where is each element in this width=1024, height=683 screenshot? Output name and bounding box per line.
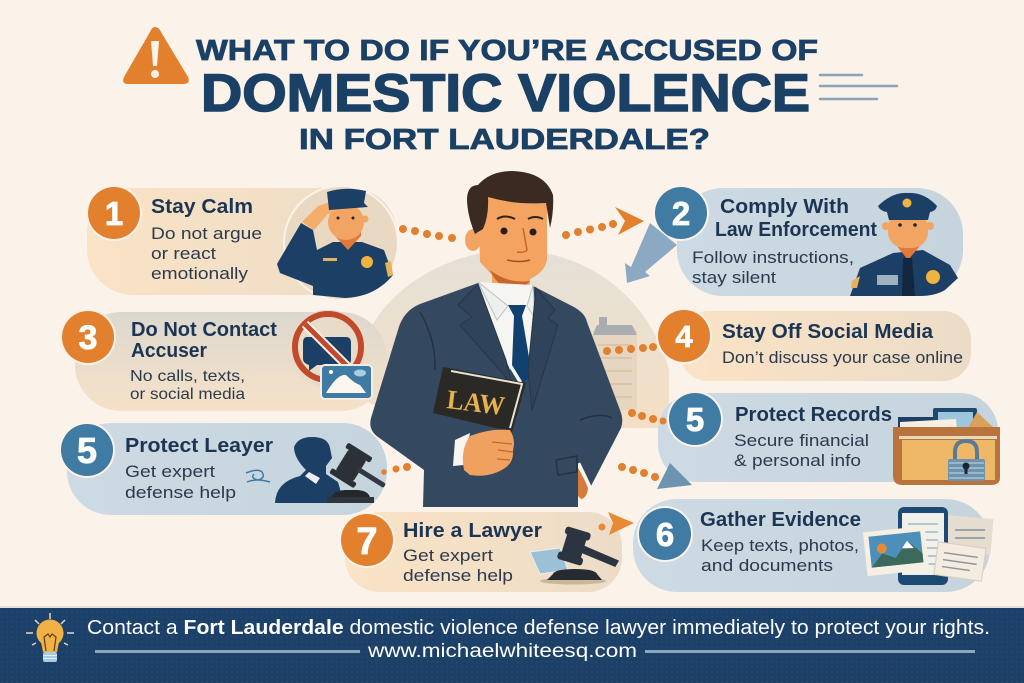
icon: saluting officer (277, 185, 399, 301)
text: step 1: Do not argue (151, 224, 262, 243)
badge: number 5 right (667, 391, 723, 447)
badge: number 2 (653, 185, 709, 241)
badge: number 7 (339, 512, 395, 568)
icon: folder with padlock (893, 408, 1000, 485)
panel: step 5 protect records (658, 391, 1000, 485)
title (196, 35, 818, 156)
text: step 7: Hire a Lawyer (403, 520, 542, 542)
badge: number 6 (637, 506, 693, 562)
head (465, 171, 553, 300)
connector: dots to step 2 with arrow (562, 207, 644, 239)
figure: lawyer holding law book (370, 171, 622, 507)
panel: step 6 gather evidence (633, 499, 993, 592)
badge: number 4 (656, 308, 712, 364)
call to action: Contact a Fort Lauderdale domestic violence defense lawyer immediately to protect your rights. (87, 617, 990, 639)
website url: www.michaelwhiteesq.com (367, 641, 637, 662)
text: step 5 right: Protect Records (735, 404, 892, 426)
text: step 6 (700, 509, 861, 575)
badge: number 1: 1 (105, 195, 123, 232)
text: step 7: Get expert (403, 546, 493, 565)
text: step 3: Do Not Contact (131, 319, 277, 341)
arrow: blue from step 2 to halo (625, 223, 677, 283)
hand (453, 430, 514, 476)
text: step 1: Stay Calm (151, 196, 253, 218)
icon: police officer (850, 193, 958, 296)
badge: number 4: 4 (675, 319, 693, 354)
text: step 1: or react (151, 244, 216, 263)
icon: warning triangle (123, 27, 189, 84)
text: step 4: Stay Off Social Media (722, 321, 934, 343)
footer banner (0, 606, 1024, 683)
title: WHAT TO DO IF YOU’RE ACCUSED OF (196, 35, 818, 67)
right hand and cuff (578, 463, 591, 499)
text: step 5 left: Get expert (125, 462, 215, 481)
text: step 2 (692, 196, 877, 287)
badge: number 5 left (59, 422, 115, 478)
text: step 5 left (125, 435, 273, 502)
connector: dots with blue arrow to step 6 (618, 463, 692, 489)
panel: step 4 stay off social media (656, 308, 971, 381)
panel: step 5 protect lawyer (59, 422, 394, 515)
badge: number 6: 6 (656, 516, 674, 553)
text: step 5 left: defense help (125, 483, 236, 502)
connector: dots from step 5 left (381, 463, 411, 475)
law book: LAW (445, 384, 506, 421)
icon: lawyer silhouette and gavel (275, 437, 394, 503)
panel: step 2 comply with law enforcement (653, 185, 963, 296)
suit pocket and sleeve detail (420, 312, 612, 475)
text: step 5 right (734, 404, 892, 470)
lapels (458, 284, 558, 410)
connector: dots step 1 to figure (399, 225, 456, 242)
law book (433, 367, 526, 432)
badge: number 3: 3 (79, 319, 97, 357)
text: step 3: or social media (130, 386, 245, 403)
text: step 3 (130, 319, 277, 403)
suit (370, 283, 622, 507)
text: step 2: Follow instructions, (692, 248, 854, 267)
text: step 6: Keep texts, photos, (701, 536, 859, 555)
text: step 1 (151, 196, 262, 283)
text: step 4: Don’t discuss your case online (722, 348, 963, 367)
backdrop: city halo (364, 250, 669, 428)
title: IN FORT LAUDERDALE? (299, 124, 710, 156)
panel: step 3 do not contact accuser (60, 309, 387, 411)
shirt and tie (478, 282, 535, 385)
text: step 1: emotionally (151, 264, 249, 283)
badge: number 1 (86, 185, 142, 241)
title: DOMESTIC VIOLENCE (201, 64, 810, 123)
text: step 7 (403, 520, 542, 585)
text: step 2: Comply With (720, 196, 849, 218)
text: step 6: Gather Evidence (700, 509, 861, 531)
text: step 6: and documents (701, 556, 833, 575)
icon: evidence documents (863, 507, 993, 585)
panel: step 1 stay calm (86, 185, 399, 301)
text: step 3: Accuser (131, 340, 207, 362)
panel: step 7 hire a lawyer (339, 512, 622, 592)
badge: number 3 (60, 309, 116, 365)
connector: dots to step 4 (603, 343, 657, 355)
text: step 4 (722, 321, 963, 367)
text: step 7: defense help (403, 566, 513, 585)
text: step 5 right: Secure financial (734, 431, 869, 450)
speed lines (820, 75, 897, 99)
icon: light bulb (26, 613, 74, 662)
icon: small scribble (246, 470, 270, 482)
text: step 2: stay silent (692, 268, 776, 287)
text: step 2: Law Enforcement (715, 219, 877, 241)
text: step 5 right: & personal info (734, 451, 861, 470)
icon: no messaging with photo (289, 310, 372, 399)
badge: number 5 left: 5 (77, 430, 97, 471)
badge: number 2: 2 (672, 195, 690, 232)
arrow: orange to step 6 (598, 512, 634, 535)
text: step 3: No calls, texts, (130, 368, 245, 385)
text: step 5 left: Protect Leayer (125, 435, 273, 457)
badge: number 5 right: 5 (686, 401, 704, 438)
icon: gavel and photo (530, 526, 618, 584)
connector: dots to step 5 right (628, 409, 666, 424)
badge: number 7: 7 (356, 521, 378, 563)
